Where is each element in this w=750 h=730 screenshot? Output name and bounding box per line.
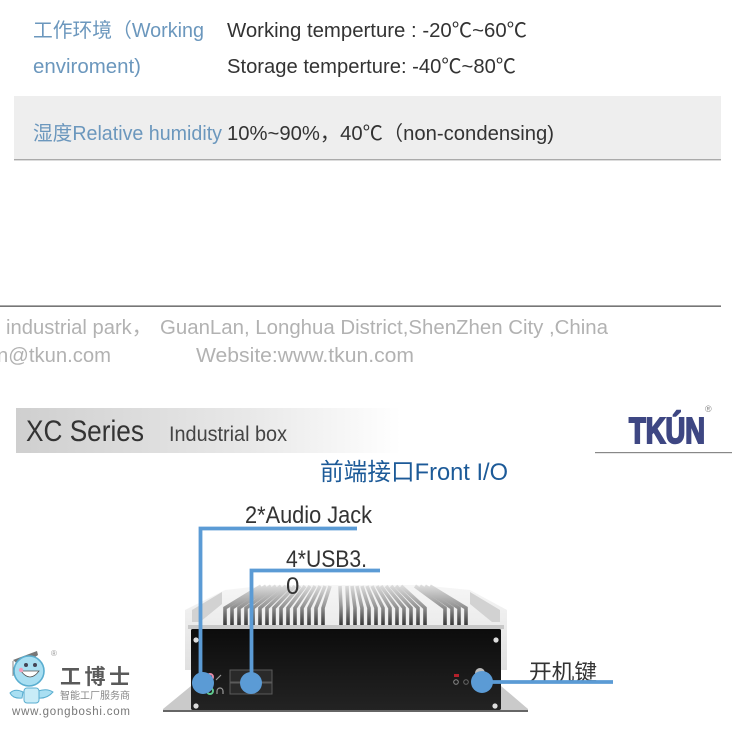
footer contact details: n@tkun.com [0,345,111,367]
label: working environment [33,19,204,78]
heading: front I/O: 前端接口Front I/O [320,459,508,486]
heat sink fins [225,586,466,625]
values: temperatures: Storage temperture: -40℃~80℃ [227,56,516,78]
mounting feet [163,686,191,712]
logo: TKUN [595,404,732,453]
logo: TKUN: ® [705,404,712,414]
watermark: gongboshi logo: ® [51,649,57,658]
label: working environment: enviroment) [33,56,141,78]
footer contact details [0,317,609,367]
USB ports [230,670,272,694]
values: temperatures [227,20,527,78]
spec row: working environment [33,19,527,78]
watermark: gongboshi logo: www.gongboshi.com [11,706,130,718]
callout: power button: 开机键 [529,660,597,685]
front panel [191,629,501,710]
watermark: gongboshi logo [10,649,130,718]
callout: USB 3.0: 4*USB3. [286,546,367,573]
callout: USB 3.0: 0 [286,573,299,600]
power indicators [454,668,485,684]
header band: XC Series [16,408,401,453]
chassis body [185,585,507,670]
mascot [10,651,53,703]
label: humidity: 湿度Relative humidity [33,122,222,145]
values: temperatures: Working temperture : -20℃~60℃ [227,20,527,42]
audio ports [207,674,223,694]
spec row: relative humidity [14,96,721,160]
footer contact details: industrial park， [6,317,152,339]
logo: TKUN: TKÚN [629,409,705,451]
footer contact details: GuanLan, Longhua District,ShenZhen City ,China [160,317,609,339]
product: industrial box front view [163,585,528,712]
value: humidity: 10%~90%，40℃（non-condensing) [227,122,554,145]
callout: audio jack: 2*Audio Jack [245,502,373,529]
callout: audio jack [192,502,373,694]
footer contact details: Website:www.tkun.com [196,345,414,367]
panel screws [193,637,499,709]
callout: power button [471,660,613,693]
callout: USB 3.0 [240,546,380,694]
wordmark: 工博士 [60,666,130,689]
label: working environment: 工作环境（Working [33,19,204,42]
watermark: gongboshi logo: 智能工厂服务商 [60,689,130,702]
header band: XC Series: XC Series [26,415,144,448]
header band: XC Series: Industrial box [169,423,287,446]
